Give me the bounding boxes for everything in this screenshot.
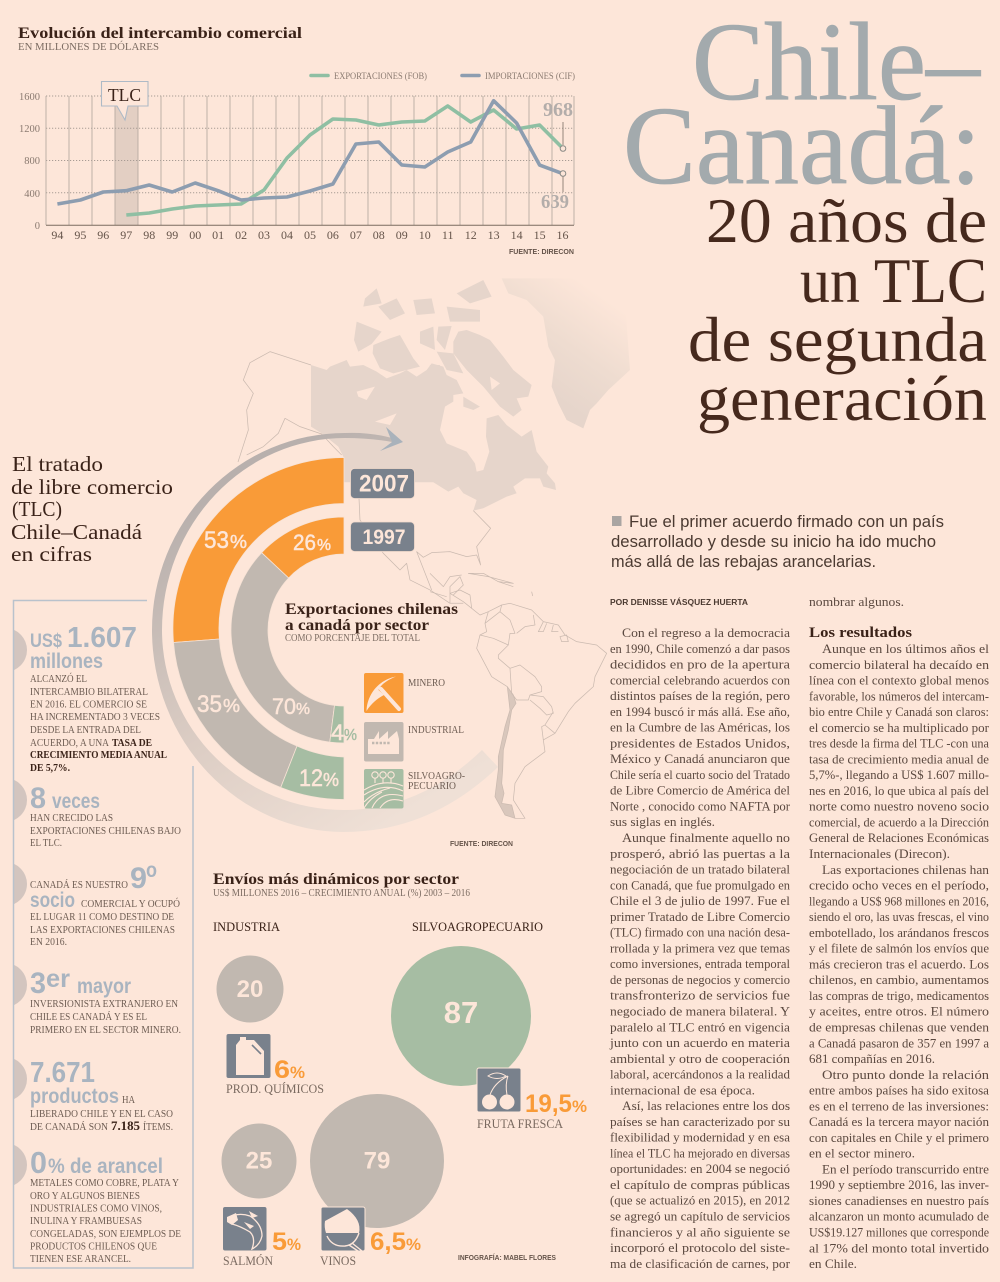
- article column 1: junto con un acuerdo en materia: [609, 1036, 790, 1050]
- article column 2: siones canadienses en nuestro país: [809, 1194, 989, 1208]
- chart x axis years: 04: [281, 228, 293, 242]
- article column 2: nes en 2016, lo que ubica al país del: [809, 784, 989, 798]
- article column 1: prosperó, abrió las puertas a la: [610, 847, 790, 861]
- stat: 7.671 productos: LIBERADO CHILE Y EN EL CASO: [30, 1108, 173, 1120]
- article column 1: se agregó un capítulo de servicios: [610, 1210, 790, 1224]
- bubble: productos químicos: [216, 956, 324, 1096]
- chart x axis years: 06: [327, 228, 339, 242]
- panel heading: el tratado en cifras: (TLC): [12, 497, 62, 521]
- ring percentage labels: %: [317, 537, 331, 554]
- year tag 2007: 2007: [359, 470, 409, 498]
- article column 1: línea el TLC ha mejorado en diversas: [610, 1146, 790, 1160]
- ring chart source: FUENTE: DIRECON: [450, 839, 513, 848]
- stat: 7.671 productos: productos: [30, 1085, 119, 1108]
- article column 2: nombrar algunos.: [809, 595, 904, 609]
- article column 2: norte como nuestro noveno socio: [809, 800, 989, 814]
- article column 1: flexibilidad y modernidad y en esa: [610, 1131, 790, 1145]
- stat: 9º socio: 9: [130, 862, 147, 895]
- chart y axis labels: 400: [24, 189, 40, 200]
- stat: 9º socio: COMERCIAL Y OCUPÓ: [81, 898, 180, 910]
- chart y axis labels: 1200: [19, 124, 40, 135]
- stat: 0% de arancel: TIENEN ESE ARANCEL.: [30, 1253, 131, 1265]
- ring percentage labels: %: [344, 727, 357, 744]
- stat: US$ 1.607 millones: TASA DE: [112, 737, 152, 749]
- article column 1: rrollada y la primera vez que temas: [610, 941, 790, 955]
- subtitle: generación: [697, 364, 987, 434]
- chart heading: Evolución del intercambio comercial: [18, 25, 303, 42]
- ring percentage labels: %: [296, 701, 310, 718]
- article column 1: ma de clasificación de carnes, por: [610, 1257, 791, 1271]
- bubble: salmón: 25: [246, 1148, 272, 1174]
- stat: 9º socio: [30, 859, 180, 948]
- stat: US$ 1.607 millones: DESDE LA ENTRADA DEL: [30, 724, 141, 736]
- article column 2: y aceites, entre otros. El número: [809, 1005, 989, 1019]
- TLC callout: [102, 82, 148, 120]
- bubble: salmón: 5: [272, 1228, 287, 1256]
- line chart: evolución del intercambio comercial: [18, 25, 575, 256]
- end value 639: 639: [541, 191, 569, 213]
- article column 1: como inversiones, entrada temporal: [610, 957, 791, 971]
- chart x axis years: 16: [556, 228, 568, 242]
- stat: 3er mayor: INVERSIONISTA EXTRANJERO EN: [30, 998, 178, 1010]
- chart x axis years: 03: [258, 228, 270, 242]
- half-ring chart: exports by sector: [173, 457, 513, 848]
- panel: key figures: [0, 600, 193, 1268]
- standfirst: [611, 512, 944, 571]
- stat: 7.671 productos: 7.185: [111, 1119, 140, 1133]
- chart x axis years: 14: [511, 228, 523, 242]
- chart y axis labels: 800: [24, 156, 40, 167]
- stat: US$ 1.607 millones: ACUERDO, A UNA: [30, 737, 109, 749]
- bubble: salmón: SALMÓN: [223, 1254, 273, 1268]
- TLC callout: TLC: [108, 85, 141, 105]
- panel heading: el tratado en cifras: El tratado: [12, 452, 103, 476]
- article column 1: en 1990, Chile comenzó a dar pasos: [610, 642, 790, 656]
- ring percentage labels: 12: [299, 765, 323, 792]
- chart legend: IMPORTACIONES (CIF): [485, 71, 575, 82]
- stat: 0% de arancel: ORO Y ALGUNOS BIENES: [30, 1190, 140, 1202]
- chart x axis years: 99: [166, 228, 178, 242]
- article column 2: Otro punto donde la relación: [822, 1068, 990, 1082]
- article column 1: en 1994 buscó ir más allá. Ese año,: [610, 705, 790, 719]
- stat: US$ 1.607 millones: millones: [30, 650, 103, 673]
- article column 2: chilenos, en cambio, aumentamos: [809, 973, 989, 987]
- stat: 8 veces: [30, 782, 181, 849]
- legend label minero: MINERO: [408, 677, 445, 689]
- article column 2: embotellado, los arándanos frescos: [809, 926, 989, 940]
- ring percentage labels: %: [230, 532, 247, 552]
- stat: 7.671 productos: ÍTEMS.: [143, 1121, 173, 1133]
- stat: 0% de arancel: % de arancel: [48, 1155, 163, 1178]
- article column 1: de Libre Comercio de América del: [610, 784, 791, 798]
- article column 2: al 17% del monto total invertido: [809, 1241, 989, 1255]
- ring percentage labels: [197, 527, 357, 792]
- stat: 8 veces: veces: [52, 790, 100, 813]
- stat: US$ 1.607 millones: HA INCREMENTADO 3 VECES: [30, 711, 160, 723]
- chart heading: [18, 25, 303, 53]
- chart y axis labels: 1600: [19, 92, 40, 103]
- bubble: productos químicos: 20: [237, 976, 263, 1003]
- stat: 0% de arancel: METALES COMO COBRE, PLATA Y: [30, 1177, 179, 1189]
- stat: US$ 1.607 millones: EN 2016. EL COMERCIO SE: [30, 699, 147, 711]
- stat: 3er mayor: er: [46, 965, 70, 993]
- panel heading: Envíos más dinámicos por sector: [213, 871, 459, 888]
- bubble: salmón: %: [287, 1235, 301, 1254]
- legend label silvoagropecuario: SILVOAGRO-: [408, 770, 465, 782]
- article column 1: ambiental y otro de cooperación: [610, 1052, 791, 1066]
- standfirst: desarrollado y desde su inicio ha ido mucho: [611, 532, 936, 551]
- chart x axis years: 11: [442, 228, 453, 242]
- exports line: [126, 106, 563, 215]
- article column 1: laboral, acercándonos a la realidad: [610, 1068, 791, 1082]
- stat: 0% de arancel: CONGELADAS, SON EJEMPLOS DE: [30, 1228, 181, 1240]
- subheading: los resultados: Los resultados: [809, 625, 912, 641]
- article column 2: crecido ocho veces en el período,: [809, 879, 989, 893]
- icon: mining pickaxe: [364, 673, 404, 713]
- article column 1: transfronterizo de servicios fue: [610, 989, 790, 1003]
- inner ring 1997: [231, 517, 344, 743]
- article column 2: Aunque en los últimos años el: [822, 642, 990, 656]
- panel heading: SILVOAGROPECUARIO: [412, 920, 543, 934]
- article column 2: Las exportaciones chilenas han: [822, 863, 990, 877]
- article column 1: Con el regreso a la democracia: [622, 626, 790, 640]
- article column 1: financieros y al año siguiente se: [610, 1225, 790, 1239]
- article column 1: con Canadá, que fue promulgado en: [610, 878, 791, 892]
- chart x axis years: 01: [212, 228, 224, 242]
- ring percentage labels: %: [223, 696, 240, 716]
- ring percentage labels: 26: [293, 530, 316, 555]
- icon: chemical jug: [226, 1034, 270, 1078]
- chart x axis years: 15: [534, 228, 546, 242]
- article column 2: a Canadá pasaron de 357 en 1997 a: [809, 1036, 989, 1050]
- stat: 7.671 productos: DE CANADÁ SON: [30, 1121, 108, 1133]
- stat: 7.671 productos: 7.671: [30, 1057, 95, 1089]
- ring chart heading: [285, 601, 458, 644]
- stat: 9º socio: o: [146, 859, 157, 882]
- stat: 9º socio: LAS EXPORTACIONES CHILENAS: [30, 924, 175, 936]
- article column 2: tres desde la firma del TLC -con una: [809, 737, 989, 751]
- article column 1: en la Cumbre de las Américas, los: [610, 721, 790, 735]
- chart x axis years: [51, 228, 568, 242]
- bubble: vinos: 6,5: [370, 1228, 406, 1256]
- ring percentage labels: 53: [204, 527, 229, 554]
- panel heading: INDUSTRIA: [213, 920, 280, 934]
- stat: 3er mayor: [30, 965, 181, 1036]
- ring percentage labels: %: [323, 770, 339, 790]
- article column 1: decididos en pro de la apertura: [610, 658, 790, 672]
- article column 1: sus siglas en inglés.: [610, 815, 715, 829]
- article column 2: llegando a US$ 968 millones en 2016,: [809, 894, 989, 908]
- infographic credit: INFOGRAFÍA: MABEL FLORES: [458, 1253, 556, 1262]
- legend label industrial: INDUSTRIAL: [408, 724, 464, 736]
- chart x axis years: 07: [350, 228, 362, 242]
- stat: 0% de arancel: INDUSTRIALES COMO VINOS,: [30, 1202, 162, 1214]
- article column 1: países se han caracterizado por su: [610, 1115, 791, 1129]
- stat: 8 veces: EXPORTACIONES CHILENAS BAJO: [30, 825, 181, 837]
- stat: 3er mayor: 3: [30, 967, 46, 1000]
- article column 1: Así, las relaciones entre los dos: [622, 1099, 790, 1113]
- article column 1: internacional de esa época.: [610, 1083, 755, 1097]
- article column 1: negociado de manera bilateral. Y: [610, 1004, 790, 1018]
- stat: 7.671 productos: HA: [122, 1094, 135, 1106]
- article column 2: alcanzaron un monto acumulado de: [809, 1210, 989, 1224]
- article column 2: 1990 y septiembre 2016, las inver-: [809, 1178, 989, 1192]
- TLC year band: [115, 96, 138, 225]
- chart x axis years: 08: [373, 228, 385, 242]
- icon: wine glass: [321, 1207, 365, 1251]
- article column 1: Aunque finalmente aquello no: [622, 831, 790, 845]
- article column 1: Chile sería el cuarto socio del Tratado: [610, 768, 790, 782]
- chart x axis years: 02: [235, 228, 247, 242]
- article column 2: y el filete de salmón los envíos que: [809, 942, 989, 956]
- article column 2: línea con el contexto global menos: [809, 674, 989, 688]
- article column 2: es en el terreno de las inversiones:: [809, 1099, 989, 1113]
- subtitle: [688, 186, 987, 434]
- chart x axis years: 98: [143, 228, 155, 242]
- stat: 7.671 productos: [30, 1057, 173, 1133]
- legend label silvoagropecuario: PECUARIO: [408, 780, 456, 792]
- ring percentage labels: 70: [272, 694, 296, 719]
- panel heading: el tratado en cifras: [11, 452, 173, 566]
- article column 2: General de Relaciones Económicas: [809, 831, 989, 845]
- chart x axis years: 97: [120, 228, 132, 242]
- stat: 9º socio: CANADÁ ES NUESTRO: [30, 879, 128, 891]
- title: Canadá:: [623, 85, 981, 208]
- subtitle: 20 años de: [706, 186, 987, 256]
- bubble: vinos: 79: [364, 1148, 390, 1174]
- article column 1: Chile el 3 de julio de 1997. Fue el: [610, 894, 791, 908]
- stat: 9º socio: EL LUGAR 11 COMO DESTINO DE: [30, 911, 174, 923]
- standfirst: más allá de las rebajas arancelarias.: [611, 552, 876, 571]
- icon: cherries: [477, 1068, 521, 1112]
- subtitle: un TLC: [800, 246, 987, 316]
- article column 2: en Chile.: [809, 1257, 857, 1271]
- article column 2: Internacionales (Direcon).: [809, 847, 950, 861]
- panel heading: [213, 871, 543, 934]
- bubble: vinos: %: [406, 1235, 421, 1254]
- article column 2: tasa de crecimiento media anual de: [809, 752, 989, 766]
- ring percentage labels: 4: [331, 720, 344, 745]
- article column 1: negociación de un tratado bilateral: [610, 863, 791, 877]
- article column 1: distintos países de la región, pero: [610, 689, 790, 703]
- panel heading: el tratado en cifras: de libre comercio: [11, 475, 173, 499]
- article column 1: comercial celebrando acuerdos con: [610, 673, 791, 687]
- article column 1: México y Canadá anunciaron que: [610, 752, 790, 766]
- article column 1: Norte , conocido como NAFTA por: [610, 800, 791, 814]
- article column 1: paralelo al TLC entró en vigencia: [610, 1020, 790, 1034]
- article column 2: 681 compañías en 2016.: [809, 1052, 935, 1066]
- stat: 8 veces: EL TLC.: [30, 837, 62, 849]
- stat: 0% de arancel: INULINA Y FRAMBUESAS: [30, 1215, 142, 1227]
- chart x axis years: 05: [304, 228, 316, 242]
- legend label silvoagropecuario: [408, 770, 465, 792]
- stat: US$ 1.607 millones: 1.607: [67, 622, 137, 654]
- chart x axis years: 10: [419, 228, 431, 242]
- chart legend: EXPORTACIONES (FOB): [334, 71, 427, 82]
- bubble: fruta fresca: %: [572, 1097, 587, 1116]
- stat: 0% de arancel: 0: [30, 1145, 47, 1180]
- bubble: vinos: [310, 1094, 444, 1268]
- background map of the Americas: [238, 278, 630, 818]
- ring percentage labels: 35: [197, 691, 222, 718]
- icon: factory: [364, 722, 404, 762]
- bubble: fruta fresca: [391, 946, 587, 1131]
- chart x axis years: 12: [465, 228, 477, 242]
- chart x axis years: 95: [74, 228, 86, 242]
- end value 968: 968: [543, 99, 573, 121]
- article column 2: las compras de trigo, medicamentos: [809, 989, 989, 1003]
- panel heading: el tratado en cifras: en cifras: [11, 542, 92, 566]
- icon: salmon: [223, 1207, 266, 1250]
- article column 2: entre ambos países ha sido exitosa: [809, 1084, 989, 1098]
- ring chart heading: a canadá por sector: [285, 617, 429, 634]
- bubble: vinos: VINOS: [320, 1254, 356, 1268]
- article column 2: bio entre Chile y Canadá son claros:: [809, 705, 989, 719]
- ring chart heading: COMO PORCENTAJE DEL TOTAL: [285, 633, 420, 644]
- end value 639: [541, 171, 569, 213]
- bubble: productos químicos: 6: [274, 1056, 290, 1084]
- ring chart heading: Exportaciones chilenas: [285, 601, 458, 618]
- article column 2: de empresas chilenas que venden: [809, 1020, 990, 1034]
- article column 1: (TLC) firmado con una nación desa-: [610, 926, 790, 940]
- article column 1: [609, 626, 791, 1271]
- article column 1: (que se actualizó en 2015), en 2012: [610, 1194, 790, 1208]
- year tag 1997: [350, 522, 414, 552]
- stat: 3er mayor: PRIMERO EN EL SECTOR MINERO.: [30, 1024, 181, 1036]
- chart y axis labels: 0: [35, 221, 40, 232]
- imports line: [57, 101, 563, 204]
- stat: US$ 1.607 millones: DE 5,7%.: [30, 762, 70, 774]
- article column 2: con capitales en Chile y el primero: [809, 1131, 989, 1145]
- chart x axis years: 13: [488, 228, 500, 242]
- bubble: fruta fresca: FRUTA FRESCA: [477, 1117, 563, 1131]
- bubble: fruta fresca: 19,5: [525, 1090, 572, 1118]
- standfirst: Fue el primer acuerdo firmado con un país: [629, 512, 944, 531]
- panel heading: US$ MILLONES 2016 – CRECIMIENTO ANUAL (%) 2003 – 2016: [213, 888, 470, 899]
- chart y axis labels: [19, 92, 40, 232]
- article column 2: favorable, los números del intercam-: [809, 689, 989, 703]
- stat: 8 veces: 8: [30, 782, 46, 815]
- article column 2: el comercio se ha multiplicado por: [809, 721, 990, 735]
- article column 1: el capítulo de compras públicas: [610, 1178, 790, 1192]
- chart x axis years: 00: [189, 228, 201, 242]
- chart heading: EN MILLONES DE DÓLARES: [18, 41, 159, 53]
- year tag 1997: 1997: [362, 525, 406, 549]
- article column 2: más crecieron tras el acuerdo. Los: [809, 957, 989, 971]
- article column 2: en el sector minero.: [809, 1147, 915, 1161]
- stat: 8 veces: HAN CRECIDO LAS: [30, 812, 113, 824]
- end value 968: [543, 99, 573, 151]
- chart legend: [311, 71, 575, 82]
- bubble: productos químicos: %: [290, 1063, 305, 1082]
- byline: POR DENISSE VÁSQUEZ HUERTA: [610, 598, 748, 607]
- article column 2: En el período transcurrido entre: [822, 1162, 989, 1176]
- stat: 9º socio: EN 2016.: [30, 936, 67, 948]
- bubble: productos químicos: PROD. QUÍMICOS: [226, 1082, 324, 1096]
- chart x axis years: 09: [396, 228, 408, 242]
- article column 1: presidentes de Estados Unidos,: [610, 736, 790, 750]
- stat: 0% de arancel: [30, 1145, 181, 1265]
- article column 2: US$19.127 millones que corresponde: [809, 1226, 989, 1240]
- chart x axis years: 94: [51, 228, 63, 242]
- article column 2: Canadá es la tercera mayor nación: [809, 1115, 990, 1129]
- stat: 9º socio: socio: [30, 889, 75, 912]
- article column 1: primer Tratado de Libre Comercio: [610, 910, 790, 924]
- article column 1: incorporó el protocolo del siste-: [610, 1241, 790, 1255]
- article column 2: 5,7%-, llegando a US$ 1.607 millo-: [809, 768, 989, 782]
- article column 1: de personas de negocios y comercio: [610, 973, 790, 987]
- article column 2: comercial, de acuerdo a la Dirección: [809, 816, 990, 830]
- curved arrow from Chile to Canada: [152, 427, 498, 832]
- stat: 3er mayor: mayor: [77, 975, 131, 998]
- stat: US$ 1.607 millones: CRECIMIENTO MEDIA ANUAL: [30, 749, 167, 761]
- bubble: fruta fresca: 87: [444, 995, 478, 1030]
- title: [623, 1, 981, 208]
- subtitle: de segunda: [688, 305, 987, 375]
- panel: envíos más dinámicos por sector: [213, 871, 587, 1268]
- article column 2: siendo el oro, las uvas frescas, el vino: [809, 910, 989, 924]
- icon: farmland and trees: [364, 769, 404, 808]
- title: Chile–: [692, 1, 981, 124]
- article column 2: comercio bilateral ha decaído en: [809, 658, 990, 672]
- bubble: salmón: [222, 1124, 301, 1268]
- chart x axis years: 96: [97, 228, 109, 242]
- stat: US$ 1.607 millones: INTERCAMBIO BILATERAL: [30, 686, 148, 698]
- stat: US$ 1.607 millones: [30, 622, 167, 774]
- stat: 0% de arancel: PRODUCTOS CHILENOS QUE: [30, 1240, 157, 1252]
- stat: US$ 1.607 millones: US$: [30, 631, 62, 652]
- chart source: FUENTE: DIRECON: [509, 247, 574, 256]
- article column 2: [809, 595, 990, 1271]
- article column 1: oportunidades: en 2004 se negoció: [610, 1162, 790, 1176]
- stat: US$ 1.607 millones: ALCANZÓ EL: [30, 673, 87, 685]
- stat: 3er mayor: CHILE ES CANADÁ Y ES EL: [30, 1011, 147, 1023]
- panel heading: el tratado en cifras: Chile–Canadá: [11, 520, 142, 544]
- outer ring 2007: [173, 457, 344, 800]
